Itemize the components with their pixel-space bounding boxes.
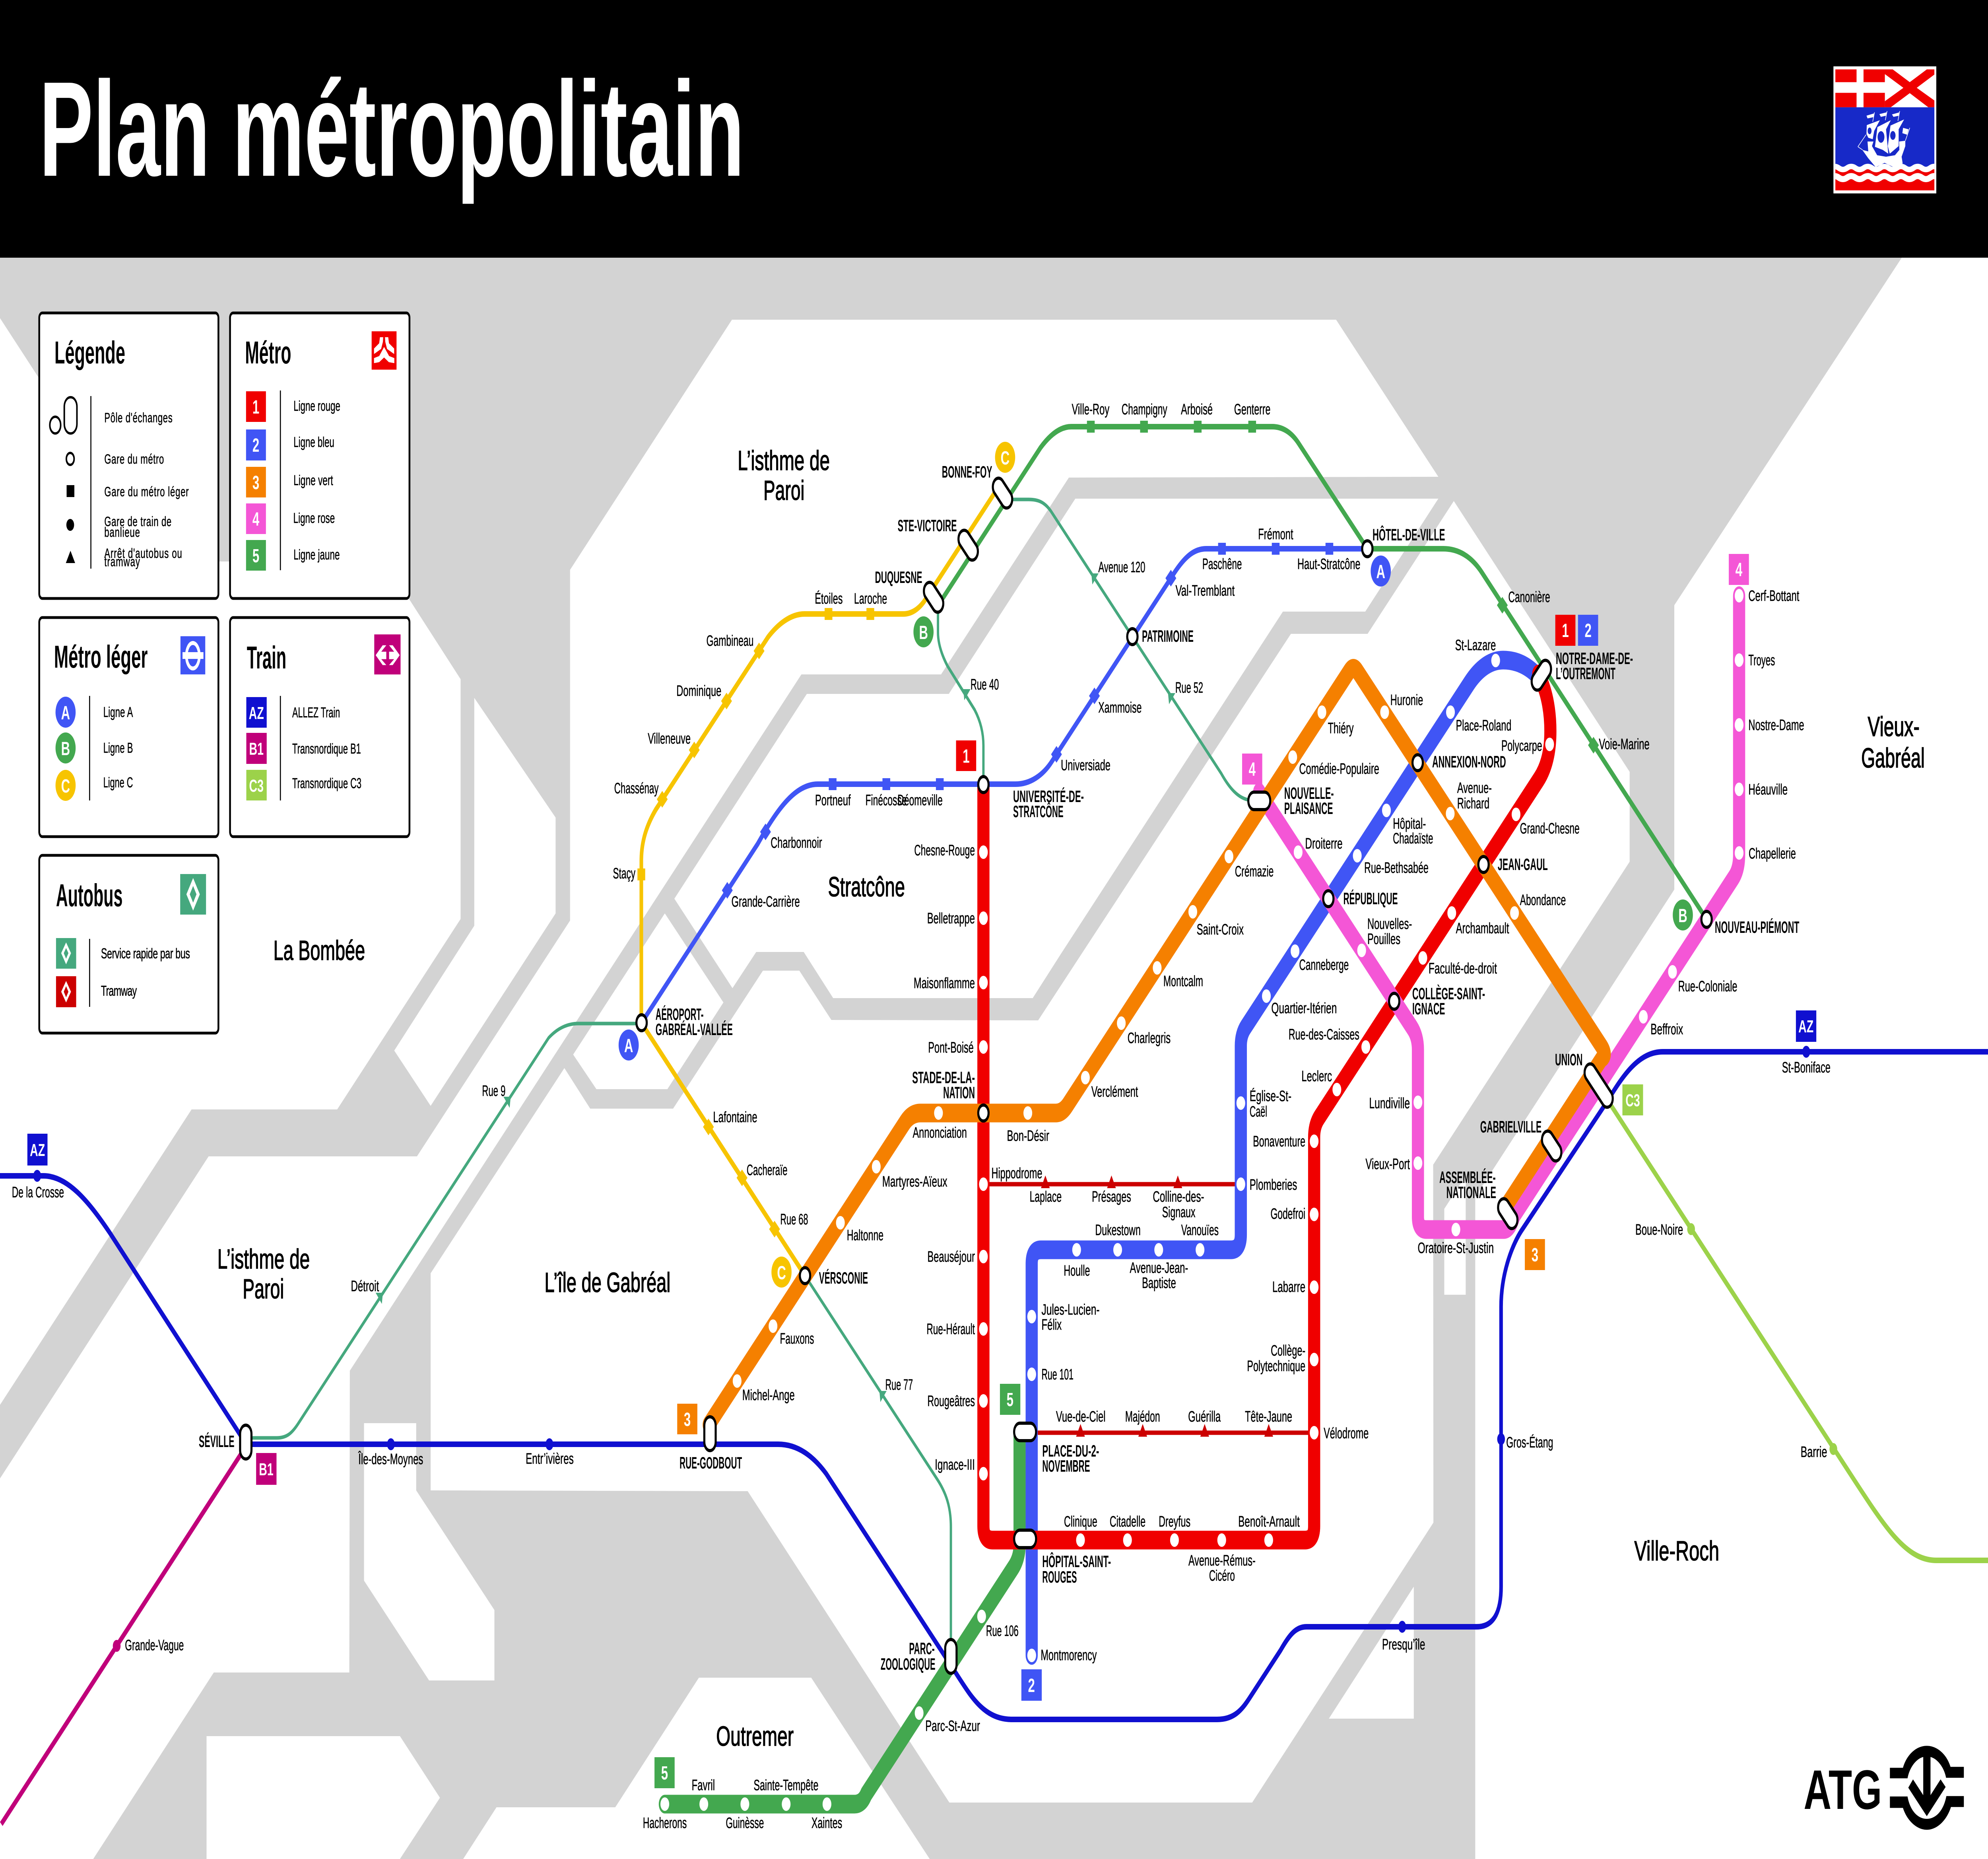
light rail line names: Ligne C (103, 775, 133, 791)
key: tramway (56, 976, 76, 1007)
station names: metro: Bonaventure (1253, 1133, 1305, 1150)
line badges: metro and train squares: AZ (30, 1140, 45, 1160)
station names: metro: Labarre (1272, 1278, 1305, 1295)
station names: light rail and bus: Rue 40 (971, 676, 999, 693)
station names: train: De la Crosse (12, 1184, 64, 1200)
metro line keys: 1 (252, 396, 259, 418)
station names: light rail and bus: Genterre (1234, 401, 1270, 418)
station names: metro: Oratoire-St-Justin (1418, 1239, 1494, 1256)
station names: metro: Richard (1457, 795, 1489, 812)
metro line keys (246, 391, 266, 571)
station names: metro: Avenue-Jean- (1130, 1259, 1188, 1276)
interchange station names: JEAN-GAUL (1498, 855, 1548, 874)
station names: light rail and bus: Champigny (1122, 401, 1167, 418)
station names: metro: Haltonne (847, 1227, 883, 1243)
interchange station names: UNIVERSITÉ-DE- (1013, 787, 1084, 806)
interchange station names: STRATCÔNE (1013, 802, 1064, 821)
metro line names: Ligne bleu (293, 435, 334, 450)
train stops (33, 1046, 1837, 1652)
region names: Outremer (716, 1721, 794, 1752)
station names: metro: Huronie (1390, 692, 1423, 708)
station names: metro: Troyes (1748, 652, 1775, 668)
station names: metro: Pont-Boisé (928, 1039, 974, 1056)
interchange station names: NOUVEAU-PIÉMONT (1715, 918, 1800, 936)
station names: train: Entr’ivières (526, 1450, 574, 1467)
interchange station names: ZOOLOGIQUE (881, 1655, 936, 1673)
station names: metro: Saint-Croix (1197, 921, 1244, 938)
station names: light rail and bus: Rue 77 (885, 1376, 913, 1393)
station names: light rail and bus: Chassénay (614, 780, 658, 796)
station names: metro: Félix (1041, 1316, 1062, 1333)
line badges: metro and train squares: 1 (963, 745, 970, 767)
interchange station names: GABRIELVILLE (1480, 1117, 1541, 1136)
header band (0, 0, 1988, 258)
station names: light rail and bus: Voie-Marine (1599, 736, 1650, 752)
station names: light rail and bus: Gambineau (707, 632, 753, 649)
station names: metro (643, 587, 1804, 1831)
interchange station names: NATION (943, 1083, 975, 1102)
station names: tramway: Vue-de-Ciel (1056, 1408, 1106, 1425)
station names: metro: Cerf-Bottant (1748, 587, 1799, 604)
line badges: metro and train squares: B1 (259, 1459, 274, 1479)
station names: metro: Vieux-Port (1365, 1156, 1410, 1172)
station names: metro: Rue-des-Caisses (1289, 1026, 1359, 1043)
interchange station names: RÉPUBLIQUE (1343, 889, 1398, 908)
station names: metro: Hippodrome (992, 1165, 1042, 1181)
station names: light rail and bus: Finécosse (866, 792, 907, 808)
interchange station names: ASSEMBLÉE- (1439, 1168, 1496, 1187)
icon: suburban train station (66, 519, 74, 531)
station names: light rail and bus: Haut-Stratcône (1297, 556, 1360, 572)
light rail line names: Ligne B (103, 740, 133, 756)
icon: city flag with ship (1831, 66, 1938, 193)
tramway lines with stops (983, 1175, 1314, 1437)
station names: train: Boue-Noire (1635, 1221, 1683, 1238)
station names: light rail and bus: Charbonnoir (771, 834, 822, 851)
station names: metro: Pouilles (1367, 930, 1400, 947)
station names: metro: Nouvelles- (1367, 915, 1412, 932)
station names: light rail and bus: Lafontaine (713, 1109, 757, 1125)
interchange station names: DUQUESNE (875, 568, 922, 587)
station names: metro: Vélodrome (1324, 1425, 1369, 1441)
station names: train: Gros-Étang (1506, 1434, 1553, 1451)
legend entries: Arrêt d'autobus ou (104, 546, 182, 561)
interchange station names: STE-VICTOIRE (898, 516, 957, 535)
train line names: ALLEZ Train (292, 705, 340, 721)
station names: metro: Charlegris (1128, 1030, 1171, 1046)
station names: metro: Quartier-Itérien (1271, 1000, 1337, 1016)
line badges: light rail circles (619, 442, 1693, 1288)
line badges: light rail circles: A (1376, 561, 1385, 583)
interchange station names: IGNACE (1412, 999, 1445, 1018)
icon: train logo (374, 634, 400, 674)
station names: metro: Canneberge (1299, 956, 1349, 973)
station names: light rail and bus (351, 401, 1650, 1393)
metro line names: Ligne jaune (293, 547, 340, 563)
light rail stops: line C (637, 608, 874, 1237)
station names: light rail and bus: Staçy (613, 865, 635, 882)
train line B1 (1, 1453, 241, 1824)
interchange station names: AÉROPORT- (656, 1005, 703, 1024)
station names: light rail and bus: Canonière (1508, 589, 1550, 605)
train line names: Transnordique B1 (292, 741, 361, 757)
legend entries: Gare de train de (104, 514, 171, 529)
train line keys: AZ (249, 703, 264, 723)
interchange station names: SÉVILLE (199, 1432, 235, 1451)
station names: train: Grande-Vague (125, 1637, 184, 1653)
interchange station names: RUE-GODBOUT (679, 1453, 742, 1472)
station names: light rail and bus: Frémont (1258, 526, 1293, 542)
icon: metro station (66, 453, 74, 465)
station names: light rail and bus: Cacheraïe (747, 1162, 788, 1178)
station names: metro: Leclerc (1301, 1068, 1332, 1084)
station names: tramway: Majédon (1125, 1408, 1160, 1425)
station names: tramway: Colline-des- (1153, 1188, 1204, 1205)
legend entries: Pôle d'échanges (104, 410, 173, 425)
station names: light rail and bus: Étoiles (815, 590, 843, 607)
station names: metro: Droiterre (1305, 835, 1343, 852)
station names: metro: Nostre-Dame (1748, 717, 1804, 733)
station names: light rail and bus: Grande-Carrière (732, 893, 800, 910)
station names: metro: Clinique (1064, 1513, 1097, 1530)
interchange station names: GABRÉAL-VALLÉE (656, 1020, 733, 1039)
station names: metro: Favril (692, 1777, 715, 1793)
light rail line names (103, 705, 133, 791)
station names: metro: Lundiville (1369, 1095, 1410, 1111)
title: Plan métropolitain (39, 54, 744, 205)
metro line 4 (1259, 596, 1739, 1230)
legend entries: tramway (104, 554, 140, 569)
interchange station names: PATRIMOINE (1142, 627, 1194, 645)
interchange station names: ANNEXION-NORD (1432, 752, 1506, 771)
region names: Ville-Roch (1634, 1535, 1719, 1566)
metro line keys: 2 (252, 434, 259, 456)
metro line 5 (665, 1432, 1019, 1804)
metro line names: Ligne vert (293, 473, 333, 488)
interchange station names: NATIONALE (1446, 1183, 1496, 1202)
interchange station names: L’OUTREMONT (1556, 664, 1615, 683)
station names: light rail and bus: Dominique (676, 682, 721, 699)
station names: metro: Ignace-III (935, 1456, 975, 1473)
heading: métro léger: Métro léger (54, 639, 148, 675)
line badges: metro and train squares: 5 (1007, 1389, 1013, 1410)
train line keys: B1 (249, 739, 264, 758)
station names: metro: Montcalm (1163, 973, 1203, 989)
station names: light rail and bus: Rue 68 (780, 1211, 808, 1228)
icon: bus logo (180, 874, 206, 915)
interchange station names: STADE-DE-LA- (912, 1068, 975, 1087)
station names: metro: Avenue- (1457, 779, 1492, 796)
line badges: light rail circles: B (919, 622, 928, 643)
light rail line C (641, 494, 994, 1276)
station names: light rail and bus: Portneuf (815, 792, 851, 808)
station names: train: Île-des-Moynes (358, 1451, 423, 1467)
station names: metro: Guinèsse (726, 1814, 764, 1831)
line badges: metro and train squares (27, 554, 1816, 1788)
interchange station names: NOVEMBRE (1042, 1457, 1090, 1475)
station names: light rail and bus: Détroit (351, 1278, 379, 1294)
station names: tramway: Présages (1092, 1188, 1131, 1205)
metro line keys: 5 (252, 545, 259, 567)
train line names (292, 705, 361, 791)
legend entries: Gare du métro léger (104, 484, 189, 499)
station names: metro: Annonciation (912, 1124, 967, 1141)
metro line 2 (1032, 660, 1538, 1655)
line badges: metro and train squares: C3 (1625, 1090, 1640, 1110)
station names: metro: Rue-Coloniale (1678, 978, 1737, 995)
metro line names (293, 398, 340, 563)
station names: metro: St-Lazare (1455, 637, 1496, 653)
station names: metro: Église-St- (1250, 1088, 1291, 1104)
station names: metro: Chadaïste (1393, 830, 1433, 847)
key: rapid bus service (56, 938, 76, 969)
station names: metro: Dukestown (1095, 1222, 1141, 1238)
metro line 1 (983, 674, 1550, 1540)
legend entries: Gare du métro (104, 452, 164, 467)
region names: L’isthme de (217, 1243, 310, 1274)
station names: metro: Rue 106 (986, 1622, 1019, 1639)
train line C3 (1608, 1101, 1988, 1560)
line badges: metro and train squares: 3 (1532, 1244, 1538, 1266)
bus service names: Service rapide par bus (101, 946, 190, 962)
train line keys (246, 697, 267, 800)
station names: metro: Benoît-Arnault (1238, 1513, 1300, 1530)
bus lines (253, 499, 1250, 1642)
station names: light rail and bus: Déomeville (897, 792, 943, 808)
icon: light rail station (67, 485, 74, 497)
light rail line A (642, 549, 1367, 1023)
metro station dots (660, 589, 1743, 1811)
line badges: metro and train squares: 3 (684, 1408, 691, 1430)
station names: metro: Caël (1250, 1103, 1267, 1120)
station names: metro: Belletrappe (927, 910, 975, 927)
panel: légende (39, 313, 218, 598)
panel: autobus (39, 855, 218, 1033)
light rail line keys: A (61, 702, 70, 724)
panel: métro (230, 313, 410, 598)
station names: metro: Rue-Bethsabée (1364, 859, 1429, 876)
light rail line keys: C (61, 775, 70, 797)
legend entries: banlieue (104, 525, 140, 540)
station names: metro: Fauxons (780, 1330, 814, 1347)
line badges: metro and train squares: AZ (1798, 1016, 1813, 1036)
station names: tramway: Guérilla (1188, 1408, 1221, 1425)
icon: interchange (50, 397, 77, 433)
metro line names: Ligne rose (293, 511, 335, 526)
station names: metro: Xaintes (812, 1814, 842, 1831)
light rail line keys (56, 697, 76, 801)
light rail line keys: B (61, 738, 70, 760)
station names: tramway: Laplace (1030, 1188, 1062, 1205)
heading: train: Train (247, 640, 286, 676)
region names (217, 445, 1925, 1752)
interchange station names: PLACE-DU-2- (1042, 1441, 1099, 1460)
region names: L’isthme de (738, 445, 830, 476)
heading: métro: Métro (245, 335, 291, 371)
heading: autobus: Autobus (56, 878, 122, 913)
station names: train (12, 1059, 1831, 1653)
station names: train: Presqu’île (1382, 1636, 1425, 1653)
station names: metro: Godefroi (1270, 1205, 1305, 1222)
region names: La Bombée (274, 935, 365, 966)
line badges: metro and train squares: 2 (1584, 620, 1592, 641)
station names: metro: Héauville (1748, 781, 1788, 798)
station names: light rail and bus: Avenue 120 (1098, 559, 1145, 575)
light rail line B (944, 427, 1706, 919)
bus service names (101, 946, 190, 999)
icon: light rail logo (181, 636, 205, 674)
station names: light rail and bus: Arboisé (1181, 401, 1213, 418)
region names: Paroi (763, 475, 804, 506)
station names: metro: Place-Roland (1456, 717, 1511, 734)
station names: metro: Martyres-Aïeux (882, 1173, 947, 1190)
icon: metro logo (372, 331, 396, 370)
interchange stations (240, 474, 1712, 1673)
station names: light rail and bus: Villeneuve (648, 730, 691, 747)
station names: metro: Archambault (1456, 920, 1509, 936)
station names: metro: Maisonflamme (914, 975, 975, 991)
region names: L’île de Gabréal (544, 1267, 670, 1298)
line badges: metro and train squares: 2 (1028, 1674, 1035, 1696)
station names: metro: Citadelle (1110, 1513, 1145, 1530)
interchange station names: HÔPITAL-SAINT- (1042, 1552, 1111, 1571)
station names: metro: Thiéry (1328, 720, 1354, 736)
station names: metro: Polytechnique (1247, 1358, 1305, 1374)
logo: ATG (1804, 1746, 1964, 1830)
metro line names: Ligne rouge (293, 398, 340, 414)
interchange station names: ROUGES (1042, 1568, 1077, 1586)
metro line 3 (709, 668, 1605, 1425)
light rail stops: line A (722, 543, 1333, 899)
station names: metro: Faculté-de-droit (1429, 960, 1497, 977)
logo: ATG: ATG (1804, 1759, 1882, 1821)
metro line keys: 4 (252, 508, 260, 530)
station names: metro: Hôpital- (1393, 815, 1426, 832)
station names: metro: Polycarpe (1501, 737, 1542, 754)
station names: metro: Rougeâtres (927, 1393, 975, 1409)
station names: metro: Verclément (1091, 1083, 1138, 1100)
station names: tramway: Signaux (1162, 1204, 1195, 1220)
station names: metro: Jules-Lucien- (1041, 1301, 1100, 1318)
interchange station names (199, 462, 1800, 1673)
train line keys: C3 (249, 776, 264, 795)
station names: tramway: Tête-Jaune (1245, 1408, 1292, 1425)
line badges: metro and train squares: 4 (1736, 559, 1742, 581)
metro line keys: 3 (252, 472, 259, 493)
station names: light rail and bus: Xammoise (1098, 699, 1142, 716)
line badges: light rail circles: B (1678, 905, 1687, 927)
station names: metro: Baptiste (1142, 1274, 1176, 1291)
station names: metro: Beauséjour (927, 1248, 975, 1265)
interchange station names: HÔTEL-DE-VILLE (1373, 525, 1445, 544)
interchange station names: UNION (1555, 1050, 1583, 1069)
station names: light rail and bus: Rue 9 (482, 1082, 505, 1099)
station names: metro: Abondance (1520, 892, 1566, 908)
icon: bus or tram stop (66, 551, 75, 563)
station names: train: Barrie (1801, 1443, 1827, 1460)
interchange station names: PARC- (909, 1639, 935, 1658)
station names: metro: Cicéro (1209, 1567, 1235, 1584)
station names: metro: Crémazie (1235, 863, 1274, 880)
station names: metro: Collège- (1271, 1342, 1305, 1359)
station names: metro: Michel-Ange (742, 1387, 795, 1403)
station names: metro: Grand-Chesne (1520, 820, 1580, 837)
bus service names: Tramway (101, 983, 137, 999)
station names: metro: Rue 101 (1041, 1366, 1074, 1383)
station names: metro: Plomberies (1250, 1176, 1297, 1193)
station names: tramway (1030, 1188, 1292, 1425)
light rail line names: Ligne A (103, 705, 133, 720)
interchange station names: BONNE-FOY (942, 462, 992, 481)
station names: metro: Vanouïes (1181, 1222, 1219, 1238)
station names: metro: Parc-St-Azur (925, 1717, 980, 1734)
light rail stops: line B (1087, 421, 1599, 754)
station names: metro: Chesne-Rouge (914, 842, 975, 859)
panel: métro léger (39, 618, 218, 837)
station names: light rail and bus: Rue 52 (1175, 679, 1203, 696)
line badges: light rail circles: C (777, 1262, 786, 1284)
interchange station names: PLAISANCE (1284, 799, 1333, 818)
line badges: metro and train squares: 1 (1562, 620, 1569, 641)
region names: Gabréal (1861, 742, 1925, 773)
station names: metro: Rue-Hérault (927, 1321, 975, 1337)
legend entries (104, 410, 189, 569)
interchange station names: NOTRE-DAME-DE- (1556, 649, 1633, 668)
station names: metro: Hacherons (643, 1814, 687, 1831)
train line AZ (0, 1052, 1988, 1719)
heading: légende: Légende (54, 335, 125, 371)
station names: light rail and bus: Ville-Roy (1072, 401, 1109, 418)
station names: metro: Houlle (1064, 1262, 1090, 1279)
station names: metro: Sainte-Tempête (753, 1777, 818, 1793)
station names: metro: Chapellerie (1749, 845, 1796, 862)
interchange station names: NOUVELLE- (1284, 784, 1334, 802)
station names: light rail and bus: Universiade (1061, 757, 1110, 773)
region names: Vieux- (1868, 711, 1920, 742)
panel: train (230, 618, 410, 837)
station names: metro: Avenue-Rémus- (1188, 1552, 1256, 1569)
region names: Paroi (243, 1273, 284, 1304)
station names: train: St-Boniface (1782, 1059, 1831, 1076)
interchange station names: VÉRSCONIE (819, 1268, 868, 1287)
train line names: Transnordique C3 (292, 776, 361, 791)
interchange station names: COLLÈGE-SAINT- (1412, 984, 1485, 1003)
station names: light rail and bus: Val-Tremblant (1175, 582, 1235, 599)
line badges: metro and train squares: 5 (661, 1762, 668, 1784)
station names: light rail and bus: Laroche (854, 590, 887, 607)
station names: light rail and bus: Paschêne (1202, 556, 1242, 572)
bus direction arrows (376, 573, 1175, 1402)
station names: metro: Bon-Désir (1007, 1127, 1049, 1144)
station names: metro: Comédie-Populaire (1299, 760, 1379, 777)
station names: metro: Dreyfus (1159, 1513, 1190, 1530)
station names: metro: Montmorency (1041, 1647, 1097, 1663)
region names: Stratcône (828, 871, 905, 902)
line badges: metro and train squares: 4 (1249, 758, 1256, 780)
station names: metro: Beffroix (1650, 1021, 1683, 1037)
line badges: light rail circles: A (624, 1035, 633, 1057)
line badges: light rail circles: C (1001, 447, 1010, 469)
